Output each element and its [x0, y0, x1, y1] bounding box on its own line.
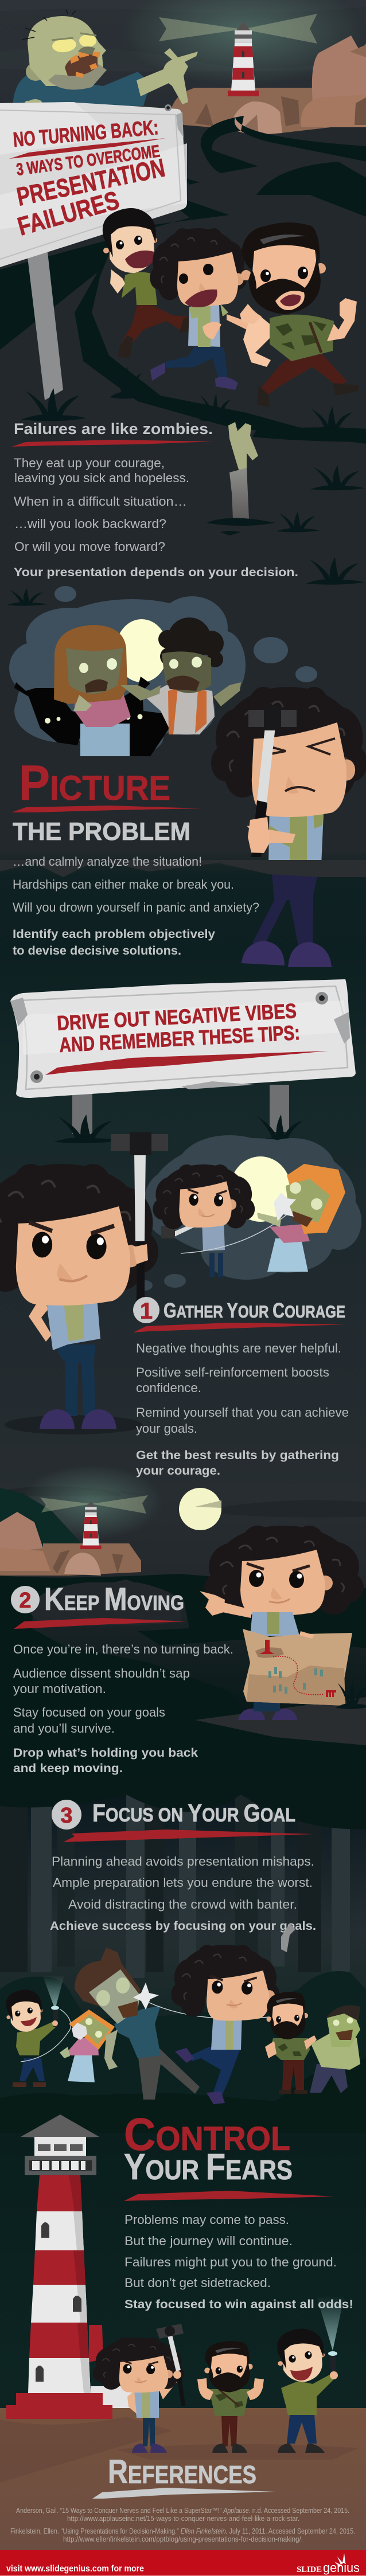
- hammer: [111, 1132, 168, 1301]
- torn edges: [10, 998, 28, 1026]
- picture the problem heading: THE PROBLEM: [13, 818, 190, 846]
- windows: [36, 2222, 81, 2382]
- trio: girl with hammer: [93, 2324, 185, 2453]
- tip 3 text: Ample preparation lets you endure the worst.: [53, 1875, 313, 1890]
- bushes: [0, 1971, 366, 2121]
- tip 2 text: your motivation.: [13, 1682, 106, 1696]
- intro text: [14, 456, 298, 579]
- title line 3: PRESENTATION: [14, 153, 168, 212]
- balcony: [25, 2156, 96, 2175]
- character: girl with hammer raised: [0, 1132, 168, 1434]
- arm: [29, 1261, 138, 1342]
- steps behind: [89, 2325, 133, 2408]
- bullet holes: [316, 992, 328, 1004]
- tip 2 text: Stay focused on your goals: [13, 1705, 165, 1719]
- icon: zombie hand rising: [207, 422, 275, 535]
- intro text: …will you look backward?: [14, 517, 166, 531]
- references text: [10, 2507, 355, 2543]
- tip 2 text: Once you’re in, there’s no turning back.: [13, 1642, 233, 1656]
- picture text: [13, 854, 259, 957]
- tip 3 text: Achieve success by focusing on your goals.: [50, 1920, 316, 1933]
- tip 3 heading: FOCUS ON YOUR GOAL: [92, 1799, 295, 1827]
- number badge: 3: [60, 1804, 73, 1828]
- ground shade: [0, 2417, 359, 2483]
- control your fears heading: [124, 2109, 334, 2201]
- tip 2 text: and keep moving.: [13, 1762, 123, 1775]
- zombie fingers: [24, 99, 45, 108]
- control text: Failures might put you to the ground.: [124, 2255, 337, 2269]
- lighthouse: [228, 21, 259, 96]
- control text: Problems may come to pass.: [124, 2213, 289, 2227]
- arm and pointing hand: [200, 1591, 252, 1618]
- brush: [63, 1830, 314, 1842]
- woman mouth: [185, 290, 217, 307]
- zombie man: [310, 2006, 360, 2093]
- impact star: [133, 1983, 159, 2010]
- panel: thought cloud of zombies: [9, 586, 317, 756]
- man mouth: [275, 291, 305, 310]
- tip 3 text: Avoid distracting the crowd with banter.: [68, 1897, 297, 1912]
- sign posts: [72, 1085, 289, 1134]
- zombie behind sign: [13, 9, 198, 108]
- picture text: Will you drown yourself in panic and anxiety?: [13, 900, 259, 914]
- brush: [133, 1323, 345, 1332]
- legs: [57, 1344, 95, 1416]
- tip 1 text: Remind yourself that you can achieve: [136, 1405, 349, 1420]
- flashlight cone: [317, 2296, 344, 2351]
- lighthouse: [80, 1501, 102, 1549]
- references text: Finkelstein, Ellen. “Using Presentations for Decision-Making.” Ellen Finkelstein. July 11, 2011. Accessed September 24, 2015.: [10, 2527, 355, 2535]
- panel: forest backdrop: [0, 1777, 366, 1978]
- panel: battle scene: [0, 1924, 366, 2133]
- character: girl holding map: [200, 1526, 364, 1720]
- tip 1 heading: GATHER YOUR COURAGE: [163, 1299, 345, 1322]
- tip 2 heading: KEEP MOVING: [44, 1581, 184, 1617]
- attacking girl: [171, 1924, 295, 2104]
- number badge: [52, 1800, 81, 1830]
- control your fears heading: CONTROL: [124, 2109, 290, 2160]
- rocks: [0, 1512, 141, 1576]
- hammer: [248, 706, 297, 857]
- brush: [11, 806, 202, 812]
- logo: [297, 2553, 360, 2575]
- banner: drive out negative vibes: [10, 979, 356, 1098]
- control text: Stay focused to win against all odds!: [124, 2298, 353, 2311]
- footer bar: [0, 2550, 366, 2576]
- number badge: 1: [140, 1299, 153, 1324]
- references heading: REFERENCES: [108, 2453, 256, 2491]
- references text: http://www.applauseinc.net/15-ways-to-conquer-nerves-and-feel-like-a-rock-star.: [67, 2515, 299, 2523]
- shoes: [242, 941, 332, 967]
- title line 1: NO TURNING BACK:: [12, 115, 159, 151]
- trio: boy with flashlight: [277, 2296, 344, 2453]
- smile: [290, 2367, 313, 2380]
- shadow: [5, 1415, 142, 1434]
- control text: [124, 2213, 353, 2311]
- transition to forest ground: [0, 860, 366, 877]
- tip 2 text: [13, 1642, 233, 1775]
- torso: [268, 800, 324, 866]
- tip 1 text: [136, 1341, 349, 1477]
- control text: But the journey will continue.: [124, 2234, 293, 2248]
- character: bearded man running: [240, 222, 359, 407]
- shoes: [238, 1709, 297, 1720]
- number badge: 2: [19, 1589, 32, 1613]
- title line 4: FAILURES: [14, 185, 122, 241]
- tip 2 text: Audience dissent shouldn’t sap: [13, 1666, 190, 1680]
- character: woman running: [150, 228, 262, 390]
- shading: [69, 2175, 89, 2358]
- zombie girl: [60, 2010, 115, 2082]
- lantern room: [34, 2137, 86, 2157]
- title line 2: 3 WAYS TO OVERCOME: [15, 142, 161, 179]
- swing arc: [148, 2002, 270, 2019]
- roof: [21, 2114, 99, 2139]
- picture text: Identify each problem objectively: [13, 928, 215, 941]
- zombie head: [22, 9, 107, 89]
- number badge: [133, 1297, 159, 1324]
- tip 2 text: and you’ll survive.: [13, 1721, 115, 1735]
- number badge: [11, 1586, 40, 1613]
- references text: http://www.ellenfinkelstein.com/pptblog/using-presentations-for-decision-making/.: [63, 2535, 303, 2543]
- brush: [92, 2488, 275, 2499]
- picture text: to devise decisive solutions.: [13, 944, 181, 957]
- tip 1 text: your courage.: [136, 1464, 220, 1477]
- panel: night sky with lighthouse: [0, 0, 366, 135]
- tip 3 text: Planning ahead avoids presentation mishaps.: [52, 1854, 314, 1869]
- panel: thought cloud of fighting: [138, 1135, 361, 1291]
- tip 1 text: Get the best results by gathering: [136, 1449, 339, 1462]
- flashlight cone: [42, 1975, 64, 2010]
- bearded man: [265, 1992, 317, 2094]
- brush: [14, 1618, 188, 1629]
- moon: [230, 1156, 291, 1222]
- grass near map: [336, 1681, 366, 1709]
- moon: [115, 619, 168, 682]
- legs: [252, 860, 321, 946]
- sign post: [27, 252, 63, 400]
- bullet hole: [165, 104, 172, 111]
- zombie arm and hand: [137, 48, 198, 104]
- intro text: Your presentation depends on your decision.: [14, 566, 298, 579]
- zombie boy: [120, 617, 241, 734]
- picture the problem heading: [11, 756, 202, 846]
- vest: [45, 1290, 100, 1350]
- grass near posts: [54, 1115, 308, 1143]
- map: [243, 1629, 352, 1706]
- brush underline: [11, 440, 213, 447]
- beams: [40, 1495, 148, 1514]
- banner text: DRIVE OUT NEGATIVE VIBES: [56, 999, 297, 1035]
- intro text: They eat up your courage,: [14, 456, 165, 470]
- swing arcs: [21, 2009, 71, 2062]
- rock platform: [170, 36, 366, 135]
- orange haired zombie: [257, 1164, 345, 1272]
- head: [0, 1164, 158, 1292]
- tip 2 text: Drop what’s holding you back: [13, 1746, 198, 1760]
- picture text: …and calmly analyze the situation!: [13, 854, 202, 869]
- moon cloud: [195, 1500, 221, 1508]
- intro text: leaving you sick and hopeless.: [14, 471, 189, 485]
- tip 1 text: confidence.: [136, 1381, 201, 1395]
- picture text: Hardships can either make or break you.: [13, 877, 234, 892]
- lighthouse beams: [159, 14, 317, 44]
- logo: SLIDE: [297, 2565, 322, 2574]
- panel: second night scene: [0, 1465, 366, 1777]
- cloud: [138, 1135, 361, 1291]
- character: girl with hammer, eyes shut: [211, 687, 366, 967]
- road verge behind zombie hand: [252, 427, 366, 442]
- small girl body: [153, 1164, 255, 1277]
- ground: [0, 2408, 366, 2550]
- footer link: visit www.slidegenius.com for more: [6, 2564, 144, 2574]
- road and dark verge at top: [0, 116, 366, 444]
- fist: [133, 1244, 148, 1264]
- boy mouth: [125, 251, 156, 268]
- control text: But don’t get sidetracked.: [124, 2276, 271, 2290]
- banner brush: [45, 1051, 328, 1075]
- intro text: When in a difficult situation…: [14, 494, 187, 509]
- logo: genius: [323, 2561, 360, 2575]
- shut eyes and mouth: [265, 738, 335, 791]
- swing arc: [181, 1210, 293, 1253]
- fist: [248, 817, 270, 853]
- character: boy running: [103, 208, 195, 358]
- tip 2 heading: [11, 1581, 188, 1629]
- grass tufts: [7, 366, 365, 606]
- picture the problem heading: PICTURE: [19, 756, 170, 811]
- trio: bearded man: [197, 2341, 264, 2453]
- tip 1 heading: [133, 1297, 345, 1332]
- silhouette zombies: [14, 677, 169, 756]
- moon: [179, 1488, 221, 1530]
- zombie body: [13, 72, 150, 106]
- title underline brush: [9, 138, 166, 159]
- references text: Anderson, Gail. “15 Ways to Conquer Nerves and Feel Like a SuperStar™!” Applause. n.d. Accessed September 24, 2015.: [16, 2507, 349, 2515]
- boy: [6, 1989, 59, 2087]
- dark hill: [0, 1488, 80, 1559]
- big zombie: [75, 1948, 200, 2100]
- brush: [124, 2191, 334, 2201]
- big lighthouse: [21, 2114, 133, 2408]
- control your fears heading: YOUR FEARS: [124, 2146, 293, 2187]
- vest: [250, 1612, 299, 1636]
- heading: failures are like zombies: Failures are like zombies.: [14, 420, 213, 437]
- tip 3 heading: [52, 1799, 314, 1842]
- torn edge: [176, 112, 184, 138]
- hammer: [156, 2324, 185, 2406]
- banner: drive out negative vibes: AND REMEMBER THESE TIPS:: [59, 1021, 301, 1057]
- shoes: [40, 1409, 116, 1429]
- road: [0, 1574, 366, 1777]
- tip 1 text: your goals.: [136, 1421, 197, 1436]
- tip 3 text: [50, 1854, 316, 1933]
- tip 1 text: Negative thoughts are never helpful.: [136, 1341, 341, 1355]
- road edge under map girl: [195, 1697, 366, 1745]
- zombie girl: [54, 625, 131, 756]
- cloud bubbles: [9, 586, 317, 756]
- intro text: Or will you move forward?: [14, 540, 165, 554]
- lighthouse base: [6, 2393, 112, 2419]
- tower bands: [37, 2175, 82, 2211]
- title sign: [0, 102, 187, 267]
- tip 1 text: Positive self-reinforcement boosts: [136, 1365, 329, 1379]
- thrown hammer: [281, 1924, 295, 1952]
